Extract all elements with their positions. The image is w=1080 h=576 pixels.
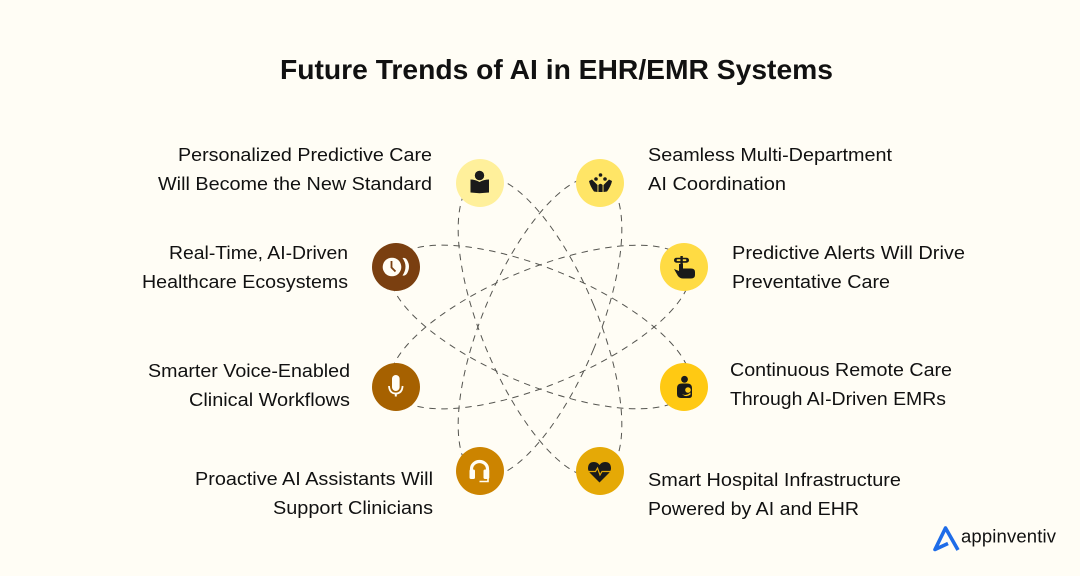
item: proactive assistants [195,447,504,518]
label: multi-department coordination: Seamless Multi-Department [648,144,892,165]
label: proactive assistants: Proactive AI Assistants Will [195,468,433,489]
label: voice-enabled workflows [148,360,350,410]
label: remote care [730,359,952,409]
label: predictive alerts [732,242,965,292]
label: personalized predictive care [158,144,432,194]
title: Future Trends of AI in EHR/EMR Systems [280,54,833,85]
logo wordmark: appinventiv [961,526,1057,546]
item: smart hospital [576,447,901,519]
label: personalized predictive care: Personalized Predictive Care [178,144,432,165]
label: voice-enabled workflows: Smarter Voice-Enabled [148,360,350,381]
label: proactive assistants [195,468,433,518]
label: smart hospital: Powered by AI and EHR [648,498,859,519]
label: voice-enabled workflows: Clinical Workflows [189,389,350,410]
item: multi-department coordination [576,144,892,207]
item: real-time ecosystems [142,242,420,292]
item: predictive alerts [660,242,965,292]
label: personalized predictive care: Will Become the New Standard [158,173,432,194]
icon: headset [456,447,504,495]
icon: person with child [660,363,708,411]
logo: appinventiv [935,526,1057,550]
label: remote care: Continuous Remote Care [730,359,952,380]
icon: logo triangle [935,528,958,550]
label: proactive assistants: Support Clinicians [273,497,433,518]
label: real-time ecosystems: Real-Time, AI-Driven [169,242,348,263]
label: predictive alerts: Preventative Care [732,271,890,292]
label: predictive alerts: Predictive Alerts Will Drive [732,242,965,263]
item: remote care [660,359,952,411]
item: personalized predictive care [158,144,504,207]
icon: hands holding people [576,159,624,207]
icon: hand with alert [660,243,708,291]
icon: clock [372,243,420,291]
icon: person reading [456,159,504,207]
item: voice-enabled workflows [148,360,420,411]
icon: microphone [372,363,420,411]
label: smart hospital [648,469,901,519]
label: multi-department coordination [648,144,892,194]
label: smart hospital: Smart Hospital Infrastructure [648,469,901,490]
orbit diagram: dashed ellipses [369,156,711,498]
label: real-time ecosystems: Healthcare Ecosystems [142,271,348,292]
label: multi-department coordination: AI Coordination [648,173,786,194]
label: real-time ecosystems [142,242,348,292]
label: remote care: Through AI-Driven EMRs [730,388,946,409]
icon: heart with pulse [576,447,624,495]
